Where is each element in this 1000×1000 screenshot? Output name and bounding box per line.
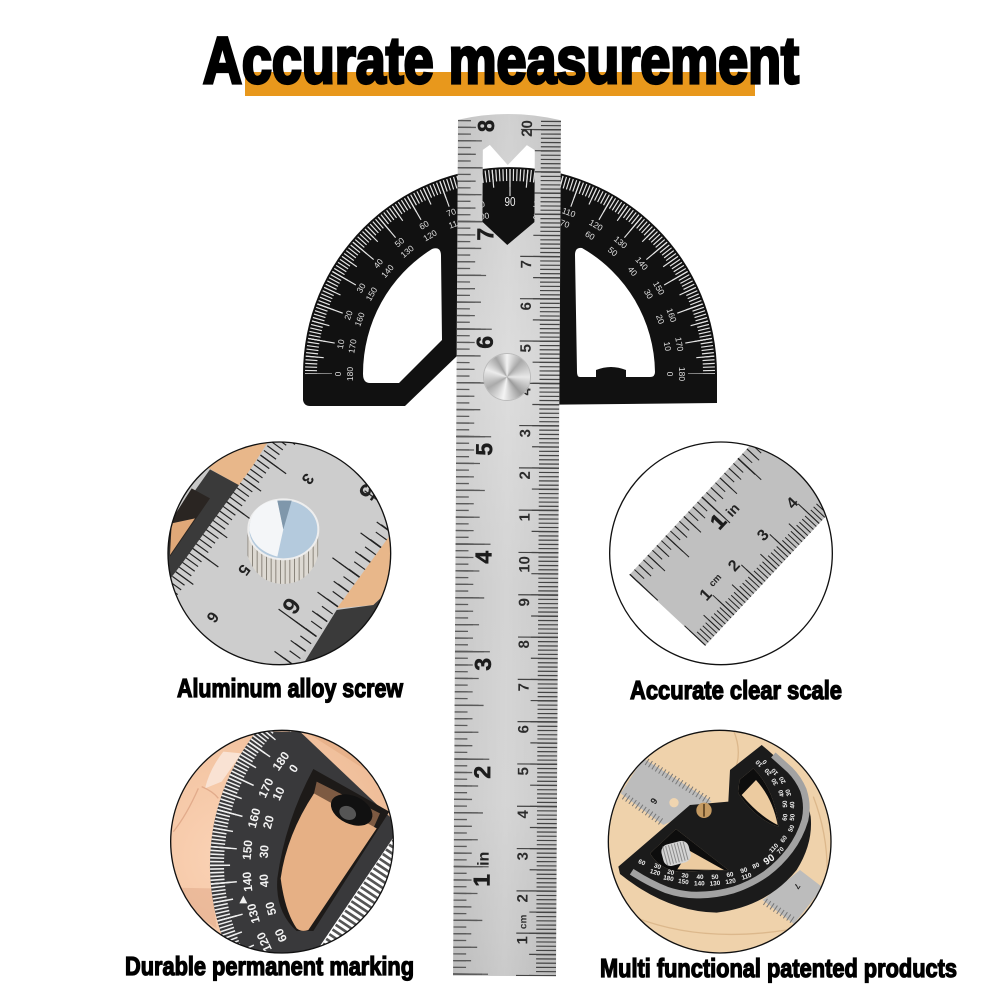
centimetre numbers: 4	[517, 386, 534, 395]
window with wood	[277, 769, 389, 931]
angle labels: 180	[662, 874, 675, 883]
protractor right labels: 140	[633, 255, 650, 272]
protractor left labels: 80	[475, 199, 486, 210]
circle: multi functional patented products: 6	[648, 796, 659, 806]
protractor right labels: 150	[651, 279, 667, 297]
fingers	[205, 752, 242, 788]
ruler close-up	[630, 446, 826, 646]
angle labels: 90	[740, 866, 749, 875]
protractor right labels: 30	[642, 287, 655, 301]
protractor right labels: 80	[532, 211, 544, 222]
angle labels: 80	[751, 861, 761, 871]
centimetre numbers: 8	[516, 640, 533, 648]
centimetre numbers: 2	[514, 894, 531, 902]
centimetre numbers: 5	[515, 767, 532, 775]
angle labels: 30	[681, 872, 689, 880]
inch numbers: 5	[471, 443, 497, 456]
title: Accurate measurement	[203, 23, 799, 97]
protractor 90 mark: 90	[504, 194, 516, 209]
inch numbers: 1	[469, 874, 495, 887]
centimetre numbers: 1	[514, 936, 531, 944]
angle labels: 150	[678, 878, 689, 886]
centimetre numbers	[514, 120, 536, 944]
ruler close-up: 3	[754, 526, 773, 545]
inch numbers: 2	[469, 766, 495, 779]
degree labels: 170	[255, 776, 277, 800]
tick marks	[210, 731, 292, 948]
circle: multi functional patented products: 7	[792, 882, 802, 891]
protractor right labels: 180	[677, 367, 687, 381]
inch numbers: 7	[472, 228, 498, 241]
angle labels: 110	[741, 872, 753, 882]
ruler ticks	[460, 118, 551, 976]
protractor left labels: 0	[333, 371, 343, 376]
dark protractor body	[210, 732, 395, 955]
angle labels: 40	[777, 789, 786, 798]
protractor right labels: 170	[673, 336, 686, 352]
protractor right labels	[532, 198, 687, 381]
protractor left labels: 180	[345, 367, 355, 381]
angle labels: 50	[711, 874, 719, 881]
degree labels: 150	[240, 839, 255, 860]
steel ruler behind	[621, 758, 712, 825]
circle: accurate clear scale	[609, 441, 833, 666]
centimetre numbers: 1	[517, 513, 534, 521]
circle: aluminum alloy screw	[167, 441, 392, 666]
angle labels: 30	[770, 776, 780, 786]
centimetre numbers: 6	[515, 725, 532, 733]
gray degree band	[632, 755, 806, 895]
degree labels: 120	[254, 930, 275, 954]
centimetre numbers: 3	[515, 852, 532, 860]
angle labels: 20	[778, 775, 788, 785]
protractor left labels: 120	[421, 227, 439, 243]
brass screw	[696, 803, 712, 818]
ruler close-up: 2	[725, 557, 744, 575]
degree labels: 20	[260, 814, 277, 830]
protractor right labels: 160	[665, 307, 679, 324]
protractor right labels: 0	[665, 372, 675, 377]
ruler close-up: cm	[707, 572, 723, 589]
ruler close-up: 5	[234, 561, 253, 578]
ruler close-up: 5	[353, 478, 382, 505]
degree labels: 10	[269, 784, 288, 803]
steel ruler	[453, 110, 561, 976]
angle labels: 20	[763, 766, 773, 777]
protractor left labels: 110	[447, 217, 464, 231]
protractor left labels: 10	[335, 338, 346, 350]
protractor	[303, 167, 717, 406]
ruler thumb knob	[484, 354, 530, 400]
angle labels: 20	[666, 869, 675, 877]
protractor right labels: 10	[662, 341, 673, 352]
angle labels: 0	[761, 757, 769, 765]
protractor right labels: 120	[587, 217, 605, 233]
protractor left labels: 100	[474, 210, 490, 223]
caption: accurate clear scale: Accurate clear scale	[630, 675, 842, 705]
protractor left labels: 170	[346, 338, 359, 354]
hole fills	[650, 768, 778, 872]
dark frame	[168, 470, 380, 661]
ruler close-up: 6	[202, 608, 222, 625]
heading highlight bar	[245, 72, 755, 96]
angle labels: 90	[762, 852, 777, 868]
ruler close-up: in	[722, 500, 743, 520]
protractor left labels: 70	[445, 206, 458, 219]
protractor left labels: 60	[417, 218, 431, 232]
angle labels: 40	[789, 801, 797, 809]
inch numbers: in	[476, 852, 493, 866]
centimetre numbers: 4	[515, 809, 532, 818]
circle: durable permanent marking	[170, 730, 394, 954]
degree labels: 0	[286, 762, 301, 775]
angle labels: 140	[694, 880, 705, 887]
centimetre numbers: 3	[517, 429, 534, 437]
lower ruler strip	[320, 838, 393, 946]
protractor right labels: 130	[612, 234, 629, 251]
protractor degree ticks	[311, 175, 709, 374]
degree labels	[242, 752, 298, 952]
degree labels: 30	[257, 844, 272, 859]
protractor left labels: 150	[364, 285, 379, 303]
black protractor	[618, 745, 811, 913]
angle labels: 60	[726, 871, 735, 879]
centimetre numbers: 9	[516, 598, 533, 606]
angle labels: 60	[637, 858, 647, 868]
wood background	[208, 443, 390, 608]
thumb screw	[330, 794, 372, 826]
angle labels: 30	[653, 862, 662, 871]
protractor right labels: 70	[559, 217, 571, 230]
knob	[661, 840, 691, 866]
angle labels: 60	[779, 834, 789, 844]
centimetre numbers: 7	[518, 260, 535, 268]
circle: multi functional patented products	[608, 730, 832, 954]
knurled screw	[247, 499, 318, 584]
inch numbers: 6	[472, 336, 498, 349]
inch numbers: 3	[470, 658, 496, 671]
angle labels: 70	[776, 845, 786, 856]
protractor right labels: 100	[532, 198, 548, 211]
centimetre numbers: 20	[519, 120, 536, 137]
protractor right labels: 110	[561, 205, 577, 219]
centimetre numbers: 6	[518, 302, 535, 310]
degree labels: 180	[270, 749, 293, 773]
ruler close-up: 3	[298, 470, 317, 487]
degree labels: 140	[240, 871, 255, 892]
protractor right labels: 60	[583, 229, 597, 242]
protractor left labels: 40	[371, 256, 385, 270]
centimetre numbers: cm	[518, 915, 529, 929]
ruler close-up	[172, 442, 389, 664]
inch numbers	[469, 120, 499, 887]
protractor left labels: 140	[379, 262, 396, 280]
degree labels: 60	[272, 926, 290, 944]
ruler close-up: 6	[276, 592, 306, 619]
protractor left labels	[333, 199, 490, 381]
protractor left labels: 20	[342, 309, 355, 321]
angle labels: 50	[789, 813, 797, 821]
protractor left labels: 30	[354, 281, 368, 295]
angle labels: 50	[787, 824, 797, 833]
angle labels: 60	[781, 813, 790, 821]
centimetre numbers: 10	[516, 556, 533, 573]
top right skin	[311, 735, 366, 770]
angle labels	[637, 757, 797, 888]
triangle pointer	[239, 896, 247, 903]
degree labels: 50	[262, 900, 279, 917]
angle labels: 50	[782, 800, 789, 808]
ruler close-up: 1	[705, 509, 731, 534]
angle labels: 40	[696, 874, 704, 881]
caption: aluminum alloy screw: Aluminum alloy screw	[177, 673, 404, 703]
ruler close-up: 4	[784, 494, 802, 513]
centimetre numbers: 2	[517, 471, 534, 479]
angle labels: 10	[754, 758, 764, 768]
protractor right labels: 40	[626, 264, 640, 278]
angle labels: 10	[770, 766, 780, 777]
centimetre numbers: 5	[518, 344, 535, 352]
angle labels: 110	[768, 842, 781, 855]
centimetre numbers: 7	[516, 683, 533, 691]
angle labels: 30	[784, 788, 793, 797]
angle labels: 130	[709, 880, 721, 888]
protractor right labels: 50	[606, 245, 620, 258]
protractor right labels: 20	[654, 313, 667, 326]
protractor left labels: 50	[393, 235, 406, 249]
protractor left labels: 160	[353, 311, 367, 328]
caption: durable permanent marking: Durable permanent marking	[125, 951, 414, 981]
inch numbers: 4	[470, 551, 496, 564]
angle labels: 120	[725, 877, 737, 886]
degree labels: 130	[244, 902, 263, 925]
inch numbers: 8	[473, 120, 499, 132]
degree labels: 40	[257, 873, 272, 888]
angle labels: 120	[649, 868, 661, 878]
ruler close-up: 1	[695, 585, 716, 604]
protractor left labels: 130	[399, 243, 416, 260]
degree labels: 160	[245, 806, 264, 830]
